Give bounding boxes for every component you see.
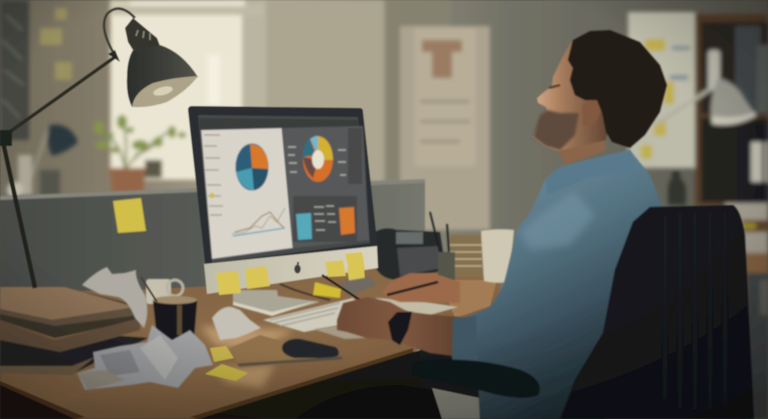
screen (198, 115, 370, 263)
pen in hand (387, 282, 438, 295)
wall light next to window (266, 0, 384, 182)
background grey lamp and equipment (7, 125, 78, 198)
donut chart (303, 136, 333, 182)
long pencil (238, 358, 342, 365)
lamp shade opening (132, 76, 198, 107)
right desk and papers (725, 203, 768, 419)
orange card (339, 207, 355, 235)
man (337, 30, 667, 419)
background white desk lamp (655, 50, 756, 125)
face (533, 40, 615, 151)
top book (0, 287, 136, 320)
ear (582, 99, 601, 126)
right side desk (440, 280, 497, 318)
plant (94, 115, 186, 193)
bottle on shelf ledge (668, 170, 686, 205)
sleeve highlight (520, 192, 595, 250)
left stack of books (0, 287, 148, 375)
lamp joint (0, 130, 12, 146)
sunlight patches on desk (200, 326, 295, 388)
line chart (232, 208, 285, 236)
hair (568, 30, 667, 148)
sleeve folds (476, 248, 585, 370)
monitor stand (233, 290, 320, 316)
monitor chin (204, 246, 378, 294)
large crumpled paper (77, 325, 213, 390)
paper stack (450, 235, 485, 277)
lamp neck (125, 18, 160, 50)
white mug behind coffee cup (146, 279, 183, 304)
yellow note block (313, 282, 341, 298)
pie chart (236, 144, 268, 190)
partition (0, 179, 425, 300)
notepad under left hand (313, 326, 366, 339)
shelf (695, 14, 768, 206)
pencil on monitor base (322, 275, 360, 300)
sticky notes on monitor (216, 252, 365, 295)
computer monitor (188, 106, 378, 295)
office chair back (560, 205, 754, 419)
pen cup (430, 212, 455, 280)
sticky notes on far wall (40, 8, 72, 80)
dashboard table (293, 196, 357, 242)
poster right (628, 12, 695, 168)
lamp hook (104, 9, 135, 52)
crumpled paper ball on desk (212, 307, 261, 340)
eye (549, 85, 560, 88)
lamp pole (3, 142, 35, 288)
desk top surface (0, 262, 500, 419)
teal card (296, 213, 312, 240)
cable and note block behind keyboard (280, 277, 376, 300)
grey device (340, 277, 376, 296)
shadow below desk (198, 340, 470, 419)
neck (556, 130, 606, 165)
white mug (481, 229, 514, 283)
smartphone (282, 339, 339, 358)
chalkboard at left (0, 0, 29, 140)
sidebar text lines (204, 135, 223, 215)
window (110, 0, 266, 180)
upper hand and forearm (382, 273, 460, 303)
data labels (288, 147, 346, 175)
paper under hands (375, 298, 458, 315)
office chair base and floor (295, 345, 560, 419)
telephone (374, 228, 446, 280)
dark data panel (282, 126, 369, 248)
lamp arm (4, 57, 115, 136)
crumpled paper behind books (82, 267, 147, 328)
desk lamp (0, 9, 198, 288)
dark corner bottom left (0, 383, 75, 419)
pencil in mug (141, 277, 157, 302)
shirt torso (452, 150, 662, 419)
dark coffee mug (153, 296, 197, 340)
chair back folds (665, 212, 725, 410)
collar (545, 150, 640, 195)
notebook, phone and pencil (230, 335, 342, 368)
forearm, watch and hands (337, 273, 460, 357)
folder labels (751, 142, 762, 182)
lamp shade (127, 45, 198, 107)
lower hand and forearm (337, 297, 460, 357)
desk (0, 262, 500, 419)
keyboard (263, 298, 357, 332)
desk edge highlight (0, 348, 413, 419)
screen toolbar (199, 118, 359, 130)
apple-style logo (294, 262, 301, 274)
sticky note on partition (113, 198, 146, 233)
poster centre (386, 0, 490, 230)
light chart panel (201, 128, 293, 259)
chair arm (412, 360, 540, 398)
cuff (452, 316, 478, 368)
yellow sticky notes on desk (205, 346, 248, 381)
monitor frame (188, 106, 378, 272)
wristwatch (388, 312, 412, 345)
right back desk items (374, 212, 514, 283)
beard (533, 110, 579, 150)
